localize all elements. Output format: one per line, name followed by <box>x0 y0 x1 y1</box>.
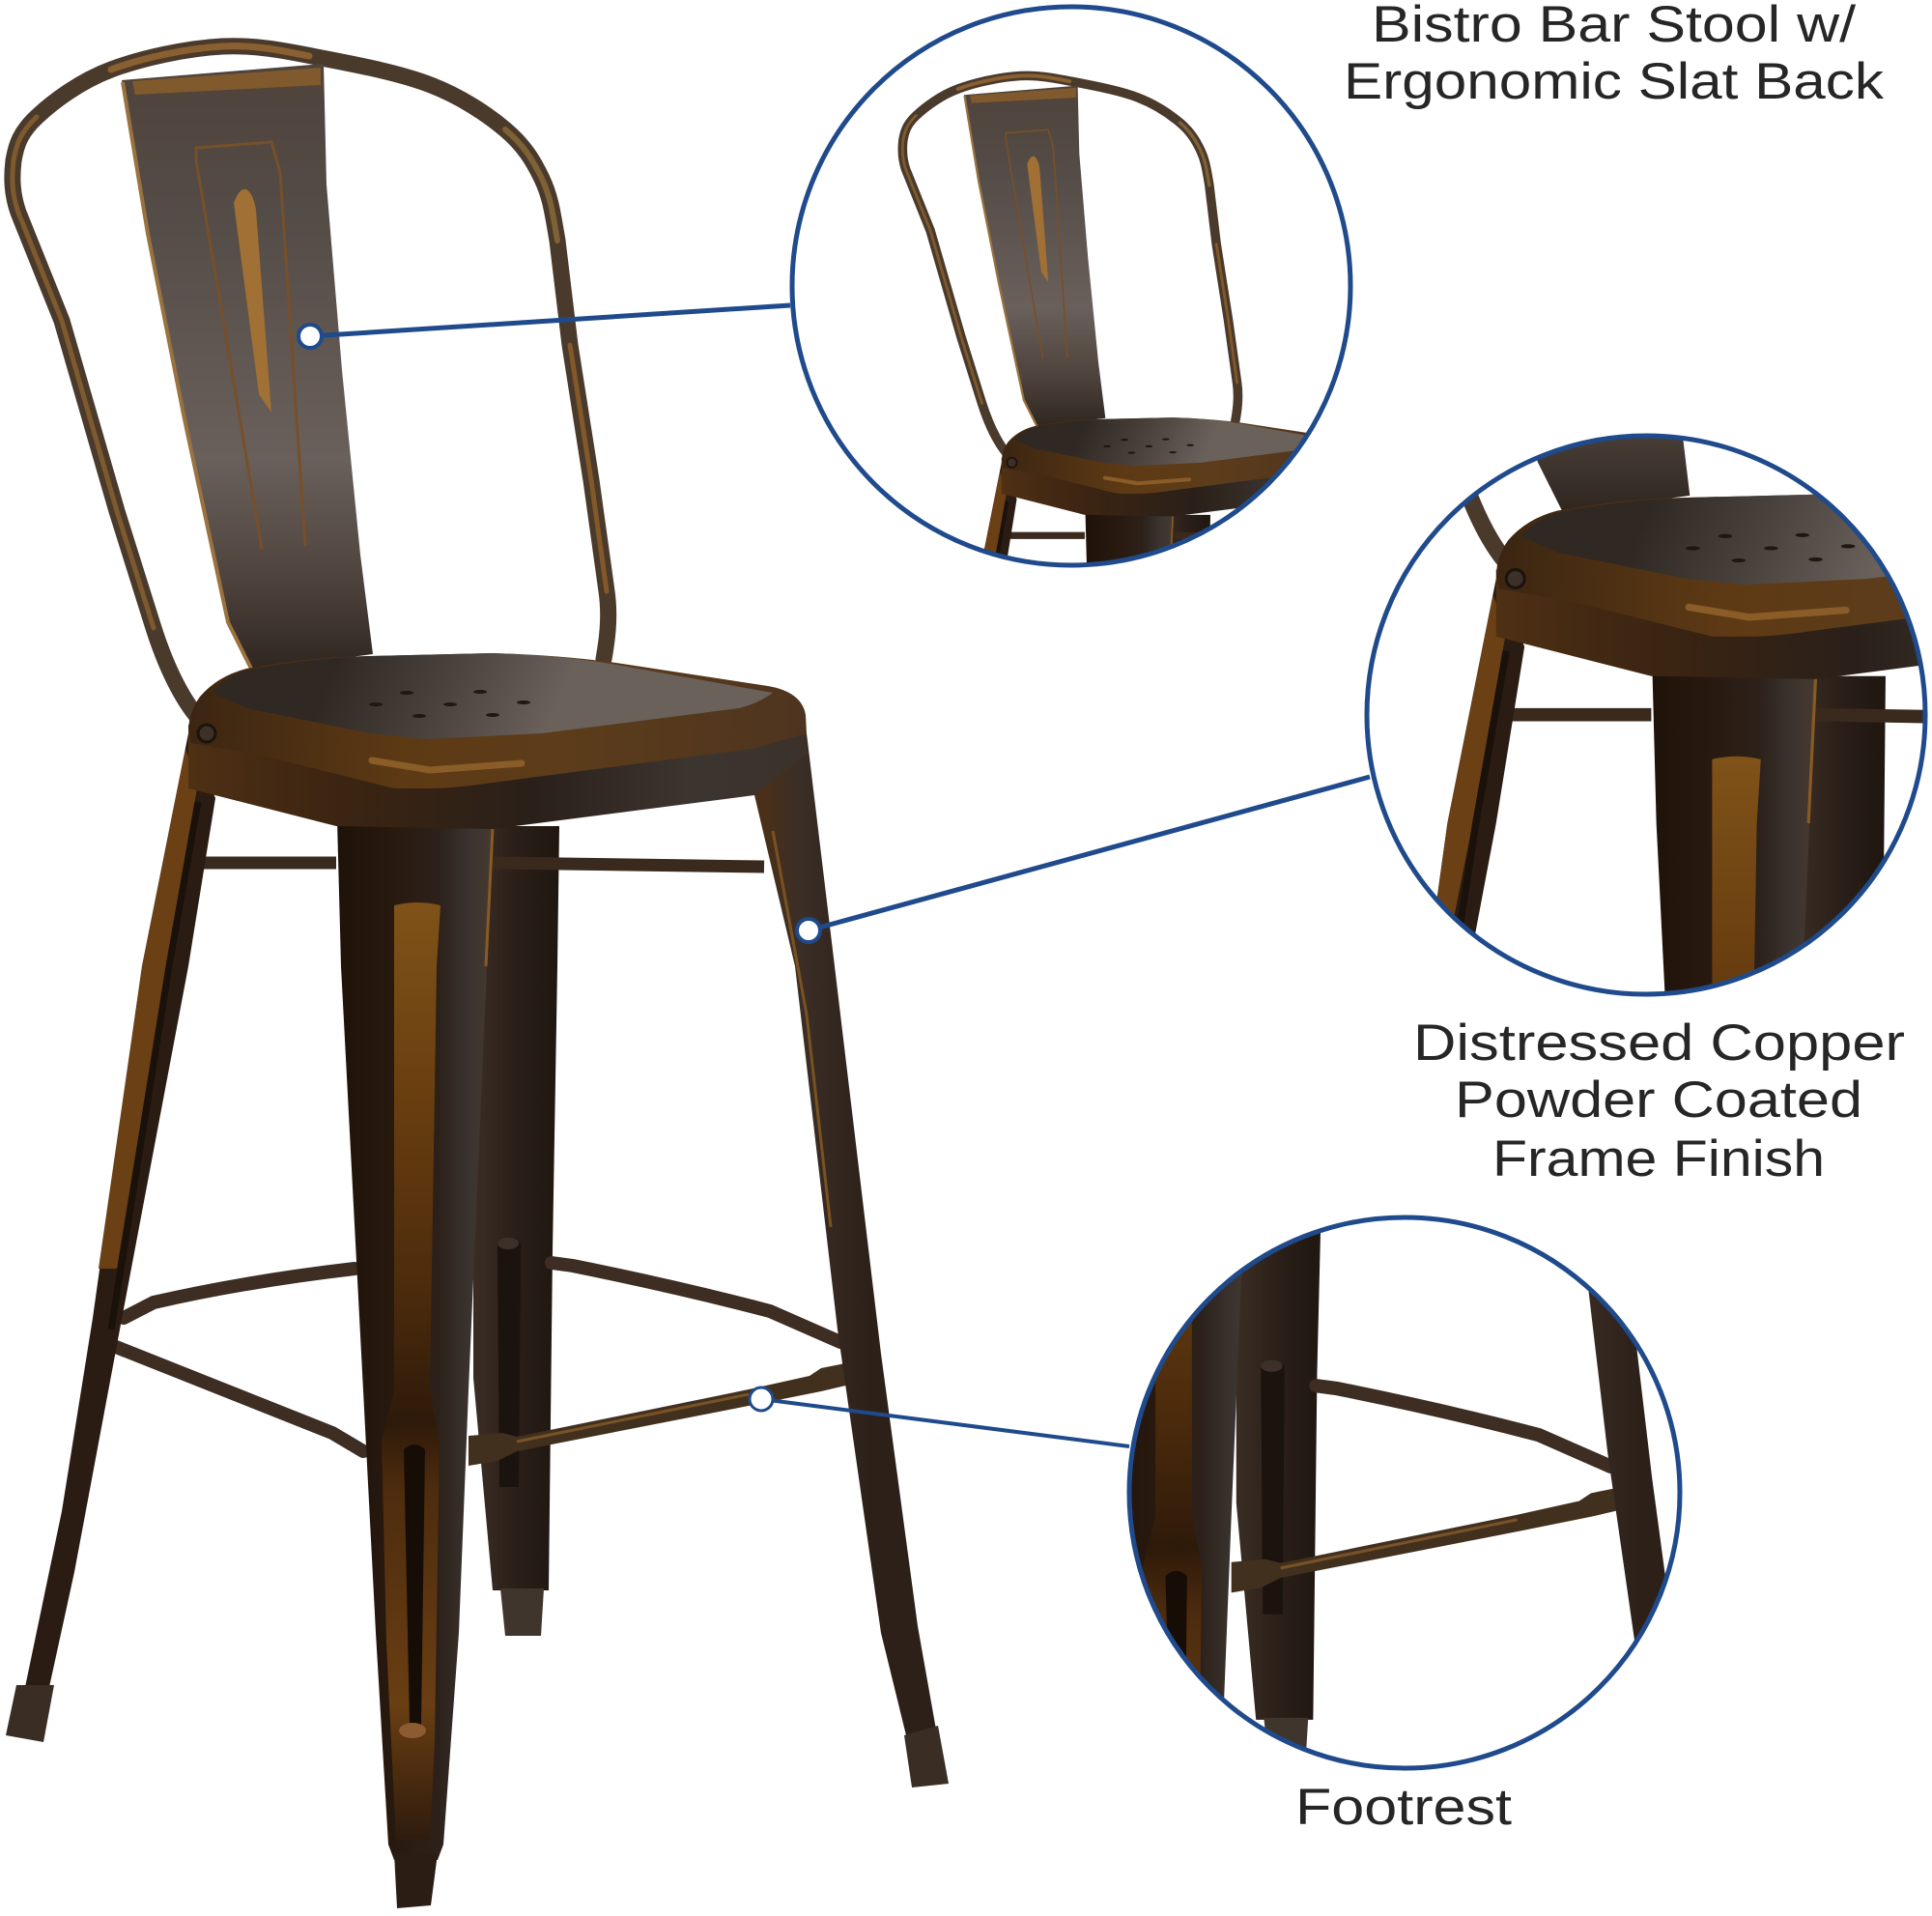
rear leg <box>473 826 559 1636</box>
label: frame finish: Powder Coated <box>1455 1072 1862 1129</box>
callout line: frame finish <box>797 777 1370 942</box>
bar stool photo <box>6 46 949 1908</box>
seat apron frame <box>188 720 807 829</box>
callout line: slat back <box>298 305 790 348</box>
backrest hoop <box>13 46 609 727</box>
front leg <box>336 783 493 1908</box>
label: frame finish: Frame Finish <box>1492 1130 1825 1187</box>
label: bistro bar stool: Ergonomic Slat Back <box>1344 53 1885 110</box>
inset circle: footrest <box>1108 1212 1690 1792</box>
label: frame finish: Distressed Copper <box>1413 1015 1905 1072</box>
footrest rails <box>111 1263 840 1451</box>
backrest slat <box>122 64 373 671</box>
label: frame finish <box>1413 1015 1905 1187</box>
front footrest bar <box>469 1362 854 1466</box>
label: footrest: Footrest <box>1295 1779 1512 1836</box>
callout line: footrest <box>750 1387 1129 1446</box>
upper stretcher bars <box>185 863 764 867</box>
seat <box>188 653 807 788</box>
inset circle: slat back <box>790 4 1352 568</box>
left leg <box>6 733 215 1742</box>
inset circle: seat and frame finish <box>1367 407 1932 1006</box>
label: bistro bar stool <box>1344 0 1885 110</box>
right leg <box>752 733 949 1787</box>
